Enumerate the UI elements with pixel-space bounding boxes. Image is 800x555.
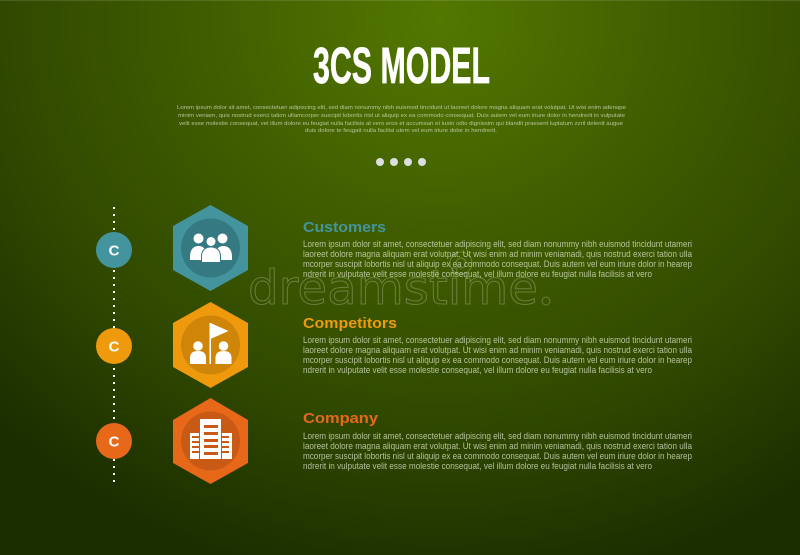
text block: competitors: ndrerit in vulputate velit esse molestie consequat, vel illum dolore eu feugiat nulla facilisis at vero [303, 365, 652, 375]
icon: flag between two people [181, 316, 240, 374]
intro text block: velit esse molestie consequat, vel illum dolore eu feugiat nulla facilisis at vero eros et accumsan et iusto odio dignissim qui blandit praesent luptatum zzril delenit augue [179, 121, 623, 127]
timeline marker: competitors [96, 328, 132, 364]
icon: office buildings [181, 412, 240, 470]
icon: people group [181, 218, 240, 278]
text block: customers: laoreet dolore magna aliquam erat volutpat. Ut wisi enim ad minim veniamadi, quis nostrud exerci tation ulla [303, 249, 692, 259]
heading: customers: Customers [303, 220, 386, 236]
heading: competitors: Competitors [303, 316, 397, 332]
dotted timeline [113, 207, 115, 484]
text block: company [303, 431, 692, 471]
text block: competitors: Lorem ipsum dolor sit amet, consectetuer adipiscing elit, sed diam nonummy nibh euismod tincidunt utameri [303, 335, 692, 345]
text block: competitors [303, 335, 692, 375]
timeline marker: company: C [109, 434, 120, 450]
timeline marker: company [96, 423, 132, 459]
row: company [96, 398, 692, 484]
intro text block [177, 105, 626, 134]
text block: customers [303, 239, 692, 279]
heading: company: Company [303, 411, 378, 427]
text block: company: ndrerit in vulputate velit esse molestie consequat, vel illum dolore eu feugiat nulla facilisis at vero [303, 461, 652, 471]
text block: company: Lorem ipsum dolor sit amet, consectetuer adipiscing elit, sed diam nonummy nibh euismod tincidunt utameri [303, 431, 692, 441]
text block: competitors: laoreet dolore magna aliquam erat volutpat. Ut wisi enim ad minim veniamadi, quis nostrud exerci tation ulla [303, 345, 692, 355]
intro text block: minim veniam, quis nostrud exerci tation ullamcorper suscipit lobortis nisl ut aliquip ex ea commodo consequat. Duis autem vel eum iriure dolor in hendrerit in vulputate [178, 113, 625, 119]
intro text block: duis dolore te feugait nulla facilisi utem vel eum iriure dolor in hendrerit. [305, 128, 497, 134]
timeline marker: competitors: C [109, 338, 120, 356]
row: customers [96, 205, 692, 291]
hexagon: customers [173, 205, 248, 291]
text block: customers: Lorem ipsum dolor sit amet, consectetuer adipiscing elit, sed diam nonummy nibh euismod tincidunt utameri [303, 239, 692, 249]
timeline marker: customers [96, 232, 132, 268]
timeline marker: customers: C [109, 242, 120, 260]
hexagon: competitors [173, 302, 248, 388]
text block: customers: mcorper suscipit lobortis nisl ut aliquip ex ea commodo consequat. Duis autem vel eum iriure dolor in hearep [303, 259, 692, 269]
text block: customers: ndrerit in vulputate velit esse molestie consequat, vel illum dolore eu feugiat nulla facilisis at vero [303, 269, 652, 279]
text block: competitors: mcorper suscipit lobortis nisl ut aliquip ex ea commodo consequat. Duis autem vel eum iriure dolor in hearep [303, 355, 692, 365]
hexagon: company [173, 398, 248, 484]
title: 3CS MODEL [313, 37, 490, 94]
row: competitors [96, 302, 692, 388]
text block: company: mcorper suscipit lobortis nisl ut aliquip ex ea commodo consequat. Duis autem vel eum iriure dolor in hearep [303, 451, 692, 461]
text block: company: laoreet dolore magna aliquam erat volutpat. Ut wisi enim ad minim veniamadi, quis nostrud exerci tation ulla [303, 441, 692, 451]
intro text block: Lorem ipsum dolor sit amet, consectetuer adipiscing elit, sed diam nonummy nibh euismod tincidunt ut laoreet dolore magna aliquam erat volutpat. Ut wisi enim adenape [177, 105, 626, 111]
watermark: dreamstime [248, 261, 538, 316]
pagination dots [376, 158, 426, 166]
